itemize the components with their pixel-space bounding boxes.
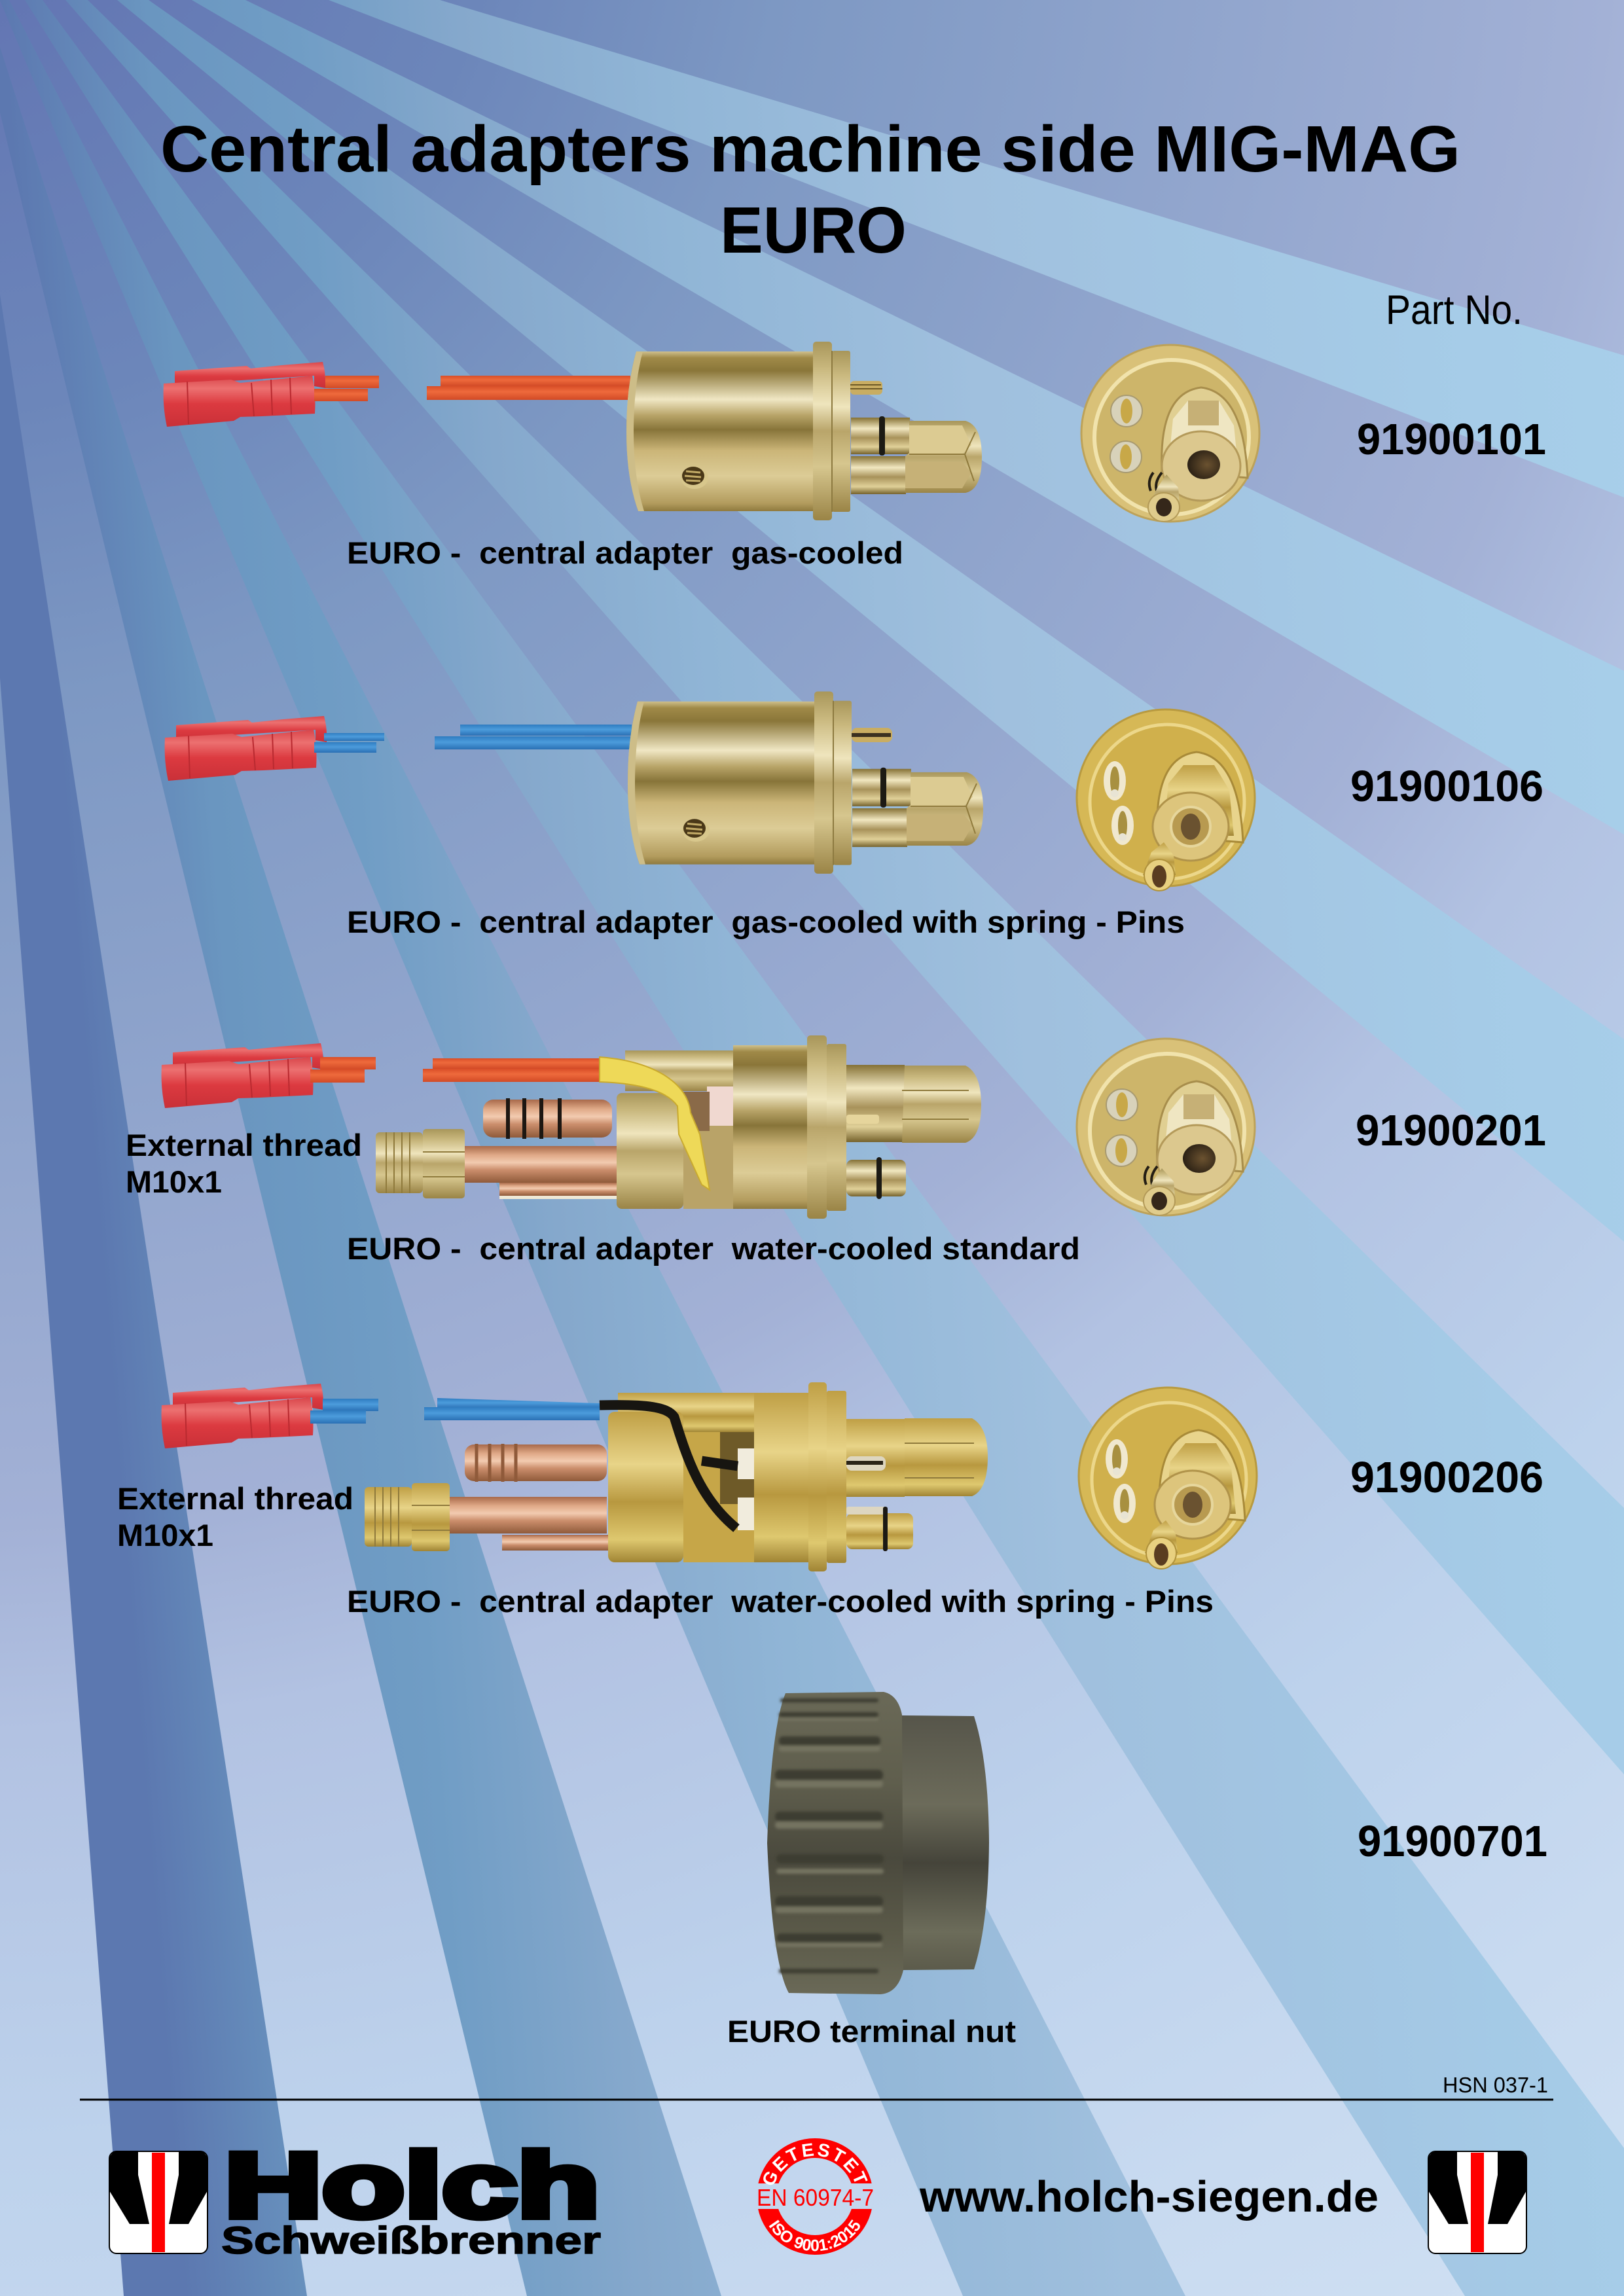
panel: water-cooled adapter with spring pins <box>117 1382 1543 1619</box>
caption: EURO - central adapter water-cooled standard <box>347 1231 1080 1266</box>
orange wires <box>314 376 630 401</box>
red terminals <box>162 1384 323 1448</box>
part number: 91900101 <box>1357 415 1546 464</box>
nut ribs <box>775 1698 884 1973</box>
brass block assembly <box>617 1035 981 1219</box>
footer logo: left mark <box>109 2151 208 2253</box>
certification stamp <box>757 2138 874 2255</box>
part number heading: Part No. <box>1386 287 1523 333</box>
brass adapter body <box>628 691 983 874</box>
spring pin <box>852 728 892 742</box>
part number: 91900106 <box>1350 762 1543 811</box>
part number: 91900201 <box>1356 1106 1546 1155</box>
caption: EURO - central adapter gas-cooled with spring - Pins <box>347 905 1185 939</box>
caption: EURO - central adapter gas-cooled <box>347 535 903 570</box>
adapter front view <box>1081 345 1259 522</box>
red terminals <box>164 362 325 427</box>
website address: www.holch-siegen.de <box>919 2172 1379 2221</box>
panel: gas-cooled adapter <box>164 342 1546 570</box>
blue wires <box>310 1398 600 1424</box>
orange wires <box>310 1057 600 1083</box>
contact pin <box>850 381 882 395</box>
nut collar <box>902 1715 989 1970</box>
caption: EURO - central adapter water-cooled with spring - Pins <box>347 1584 1214 1619</box>
adapter front view <box>1077 1039 1255 1215</box>
footer brand name <box>221 2134 601 2262</box>
red terminals <box>162 1043 323 1108</box>
thread note <box>117 1481 353 1552</box>
title: EURO <box>720 194 907 267</box>
brass adapter body <box>626 342 982 520</box>
footer brand name: Holch <box>225 2134 600 2236</box>
certification stamp: EN 60974-7 <box>757 2184 874 2211</box>
panel: terminal nut <box>727 1692 1547 2049</box>
adapter front view <box>1079 1388 1257 1569</box>
thread note <box>126 1128 362 1199</box>
part number: 91900206 <box>1350 1453 1543 1502</box>
copper pipes with hex fitting <box>365 1444 612 1551</box>
thread note: M10x1 <box>126 1164 222 1199</box>
adapter front view <box>1077 709 1255 891</box>
panel: gas-cooled adapter with spring pins <box>165 691 1543 939</box>
yellow hose <box>600 1057 710 1190</box>
part number: 91900701 <box>1358 1817 1547 1866</box>
certification stamp: ISO 9001:2015 <box>768 2219 860 2251</box>
title: Central adapters machine side MIG-MAG <box>160 113 1460 186</box>
copper pipes with hex fitting <box>376 1098 621 1199</box>
brass block assembly <box>608 1382 988 1571</box>
footer brand name: Schweißbrenner <box>221 2219 601 2262</box>
certification stamp: GETESTET <box>763 2143 868 2185</box>
red terminals <box>165 716 327 781</box>
title <box>160 113 1460 267</box>
blue wires <box>314 725 632 753</box>
thread note: External thread <box>126 1128 362 1162</box>
thread note: M10x1 <box>117 1518 213 1552</box>
caption: EURO terminal nut <box>727 2014 1016 2049</box>
panel: water-cooled standard adapter <box>126 1035 1546 1266</box>
document code: HSN 037-1 <box>1443 2073 1548 2097</box>
thread note: External thread <box>117 1481 353 1516</box>
footer logo: right mark <box>1428 2151 1526 2253</box>
black hose <box>600 1405 738 1528</box>
knurled nut body <box>767 1692 903 1994</box>
